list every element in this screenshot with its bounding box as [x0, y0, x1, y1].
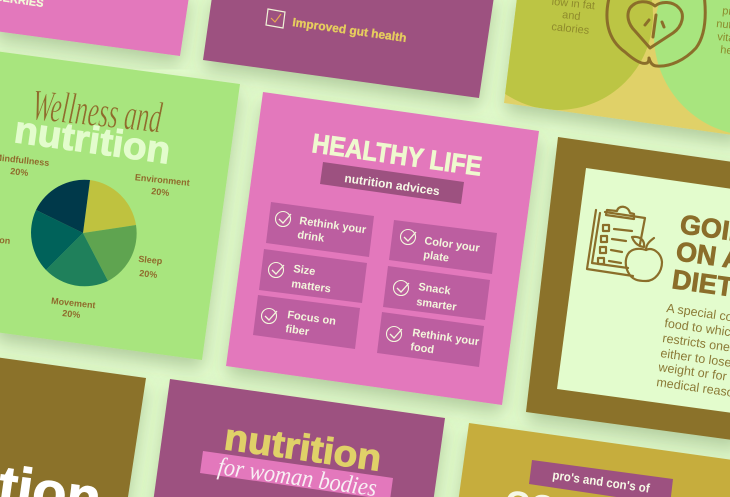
- subtitle banner: [320, 162, 464, 204]
- pie labels: [0, 152, 190, 320]
- title: healthy life: HEALTHY LIFE: [310, 128, 484, 182]
- icon: apple half: [607, 0, 705, 66]
- title: nutrition: nutrition: [12, 109, 173, 173]
- script heading: Wellness and: [30, 80, 165, 143]
- pie labels: 20%: [10, 166, 29, 178]
- panel: healthy life card: [226, 92, 539, 405]
- benefit text: Improved gut health: [292, 15, 407, 45]
- panel: for woman bodies card: [152, 379, 445, 497]
- advice: rethink your drink: Rethink your: [299, 215, 368, 236]
- pie labels: 20%: [62, 308, 81, 320]
- advice: rethink your drink: [266, 202, 374, 257]
- pie labels: 20%: [139, 268, 158, 280]
- advice: focus on fiber: fiber: [285, 323, 311, 338]
- panel: benefits card: [203, 0, 495, 98]
- left venn text: [551, 0, 596, 37]
- pie labels: Movement: [51, 296, 96, 310]
- banner: pro's and con's of: [552, 468, 651, 496]
- icon: clipboard and apple: [587, 207, 662, 281]
- advice: size matters: [259, 249, 367, 303]
- title: going on a diet: [670, 209, 730, 303]
- advice: rethink your food: [377, 312, 484, 367]
- advice: rethink your drink: drink: [297, 229, 326, 245]
- advice: rethink your food: Rethink your: [412, 327, 481, 348]
- panel: wellness and nutrition card: [0, 51, 240, 360]
- panel: brown nutrition card: [0, 357, 146, 497]
- description: [656, 301, 730, 402]
- advice: snack smarter: [383, 266, 490, 320]
- advice: color your plate: plate: [423, 249, 450, 265]
- advice: rethink your food: food: [410, 341, 435, 356]
- advice: focus on fiber: Focus on: [287, 309, 337, 328]
- advice: snack smarter: smarter: [416, 296, 458, 314]
- pie labels: Sleep: [138, 254, 163, 266]
- left venn text: calories: [551, 21, 590, 37]
- panel: berries card: [0, 0, 190, 56]
- pink banner: [200, 451, 393, 497]
- title: nutrition: nutrition: [222, 416, 384, 479]
- advice: snack smarter: Snack: [418, 281, 452, 298]
- pie labels: 20%: [151, 186, 170, 198]
- icon: checkbox: [266, 9, 285, 28]
- right venn text: [716, 5, 730, 59]
- description: weight or for: [657, 360, 728, 384]
- subtitle banner: nutrition advices: [344, 171, 441, 198]
- left venn text: and: [562, 9, 581, 23]
- advice: focus on fiber: [253, 295, 360, 349]
- panel: pros and cons card: [457, 423, 730, 497]
- advice: size matters: matters: [291, 278, 332, 296]
- pie labels: Environment: [134, 172, 190, 188]
- banner: [529, 460, 673, 497]
- panel: going on a diet card: [526, 137, 730, 441]
- advice: size matters: Size: [293, 263, 316, 278]
- pie chart: [31, 180, 137, 286]
- advice: color your plate: Color your: [424, 235, 481, 255]
- panel: venn diagram card: [463, 0, 730, 136]
- advice: color your plate: [389, 220, 497, 274]
